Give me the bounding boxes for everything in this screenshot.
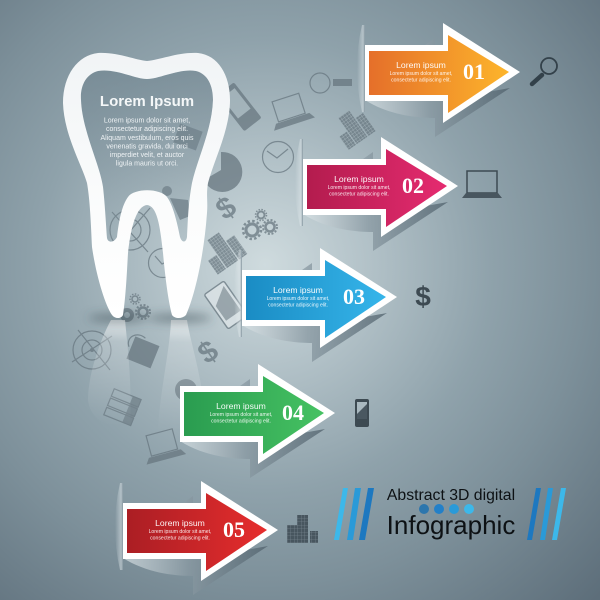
icon: buildings right — [287, 515, 318, 543]
tooth reflection — [88, 320, 203, 431]
tooth floor shadow — [88, 314, 212, 322]
label 03: Lorem ipsum dolor sit amet, — [267, 296, 329, 302]
title line 1: Abstract 3D digital — [387, 487, 515, 504]
title line 2: Infographic — [387, 510, 515, 540]
label 05: Lorem ipsum — [155, 518, 205, 528]
arrow 04 — [180, 364, 335, 478]
label 03 — [267, 285, 329, 308]
colour body 03 — [246, 260, 386, 338]
shadow 02 — [303, 152, 448, 251]
icon: buildings — [330, 105, 376, 150]
tooth inner shade — [81, 70, 213, 242]
shadow 03 — [242, 263, 387, 362]
tooth body text: Lorem ipsum dolor sit amet, — [104, 118, 190, 124]
icon: tablet — [204, 281, 248, 329]
blue dots — [419, 504, 474, 514]
tooth — [63, 53, 230, 318]
label 05 — [149, 518, 211, 542]
white outline 02 — [303, 137, 458, 237]
left stripes — [334, 488, 374, 540]
tooth shape — [63, 53, 230, 318]
label 04: consectetur adipiscing elit. — [211, 418, 271, 424]
tooth body text: consectetur adipiscing elit. — [106, 126, 188, 133]
arrow 01 — [357, 23, 520, 137]
label 04: Lorem ipsum — [216, 401, 266, 411]
number 02: 02 — [402, 173, 424, 198]
colour body 05 — [127, 493, 267, 571]
icon: phone — [217, 82, 262, 131]
shadow 04 — [180, 379, 325, 478]
icon: phone right — [355, 399, 369, 427]
icon: laptop — [265, 91, 315, 131]
tooth body text: venenatis gravida, dui orci — [106, 143, 188, 150]
label 01: consectetur adipiscing elit. — [391, 78, 451, 84]
icon: laptop right — [462, 171, 502, 198]
arrow 02 — [295, 137, 458, 251]
icon: reflected target — [72, 330, 112, 370]
icon: gears — [243, 210, 277, 239]
label 01: Lorem ipsum dolor sit amet, — [390, 71, 452, 77]
number 03: 03 — [343, 284, 365, 309]
label 05: Lorem ipsum dolor sit amet, — [149, 529, 211, 535]
label 01 — [390, 60, 452, 84]
right stripes — [527, 488, 566, 540]
white outline 03 — [242, 248, 397, 348]
label 01: Lorem ipsum — [396, 60, 446, 70]
icon: dollar right: $ — [415, 281, 431, 312]
fold 03 — [234, 250, 242, 337]
fold 05 — [115, 483, 123, 570]
arrow 05 — [115, 481, 278, 595]
number 01: 01 — [463, 59, 485, 84]
icon: clock behind tooth — [148, 248, 178, 278]
icon: person behind tooth — [162, 186, 190, 220]
icon: magnifier — [310, 73, 352, 93]
colour body 01 — [369, 35, 509, 113]
icon: target behind tooth — [110, 208, 150, 252]
icon: gears small near root — [122, 294, 150, 320]
icon: clock — [262, 142, 294, 172]
shadow 05 — [123, 496, 268, 595]
label 02: consectetur adipiscing elit. — [329, 192, 389, 198]
icon: reflected binders — [104, 389, 141, 426]
icon: briefcase behind tooth — [173, 123, 203, 151]
fold 01 — [357, 25, 365, 112]
icon: reflected dollar: $ — [192, 334, 225, 371]
white outline 05 — [123, 481, 278, 581]
label 05: consectetur adipiscing elit. — [150, 536, 210, 542]
icon: reflected pie — [175, 379, 197, 401]
icon: reflected briefcase — [122, 332, 161, 368]
label 04: Lorem ipsum dolor sit amet, — [210, 412, 272, 418]
label 02: Lorem ipsum — [334, 174, 384, 184]
icon: pie chart — [204, 152, 242, 192]
label 02: Lorem ipsum dolor sit amet, — [328, 185, 390, 191]
tooth body text: ligula mauris ut orci. — [116, 160, 178, 168]
white outline 01 — [365, 23, 520, 123]
icon: reflected laptop — [139, 427, 186, 465]
icon: buildings lower — [198, 226, 247, 275]
title block — [334, 487, 566, 540]
tooth body text — [100, 118, 194, 168]
label 04 — [210, 401, 272, 424]
number 04: 04 — [282, 400, 304, 425]
number 05: 05 — [223, 517, 245, 542]
white outline 04 — [180, 364, 335, 464]
tooth body text: imperdiet velit, et auctor — [110, 152, 185, 159]
label 03: Lorem ipsum — [273, 285, 323, 295]
tooth body text: Aliquam vestibulum, eros quis — [100, 135, 194, 142]
background icons — [72, 73, 376, 465]
colour body 02 — [307, 149, 447, 227]
shadow 01 — [365, 38, 510, 137]
arrow 03 — [234, 248, 397, 362]
label 02 — [328, 174, 390, 198]
label 03: consectetur adipiscing elit. — [268, 302, 328, 308]
icon: dollar: $ — [210, 190, 243, 227]
colour body 04 — [184, 376, 324, 454]
tooth heading: Lorem Ipsum — [100, 93, 194, 110]
fold 02 — [295, 139, 303, 226]
icon: magnifier right — [532, 58, 557, 84]
